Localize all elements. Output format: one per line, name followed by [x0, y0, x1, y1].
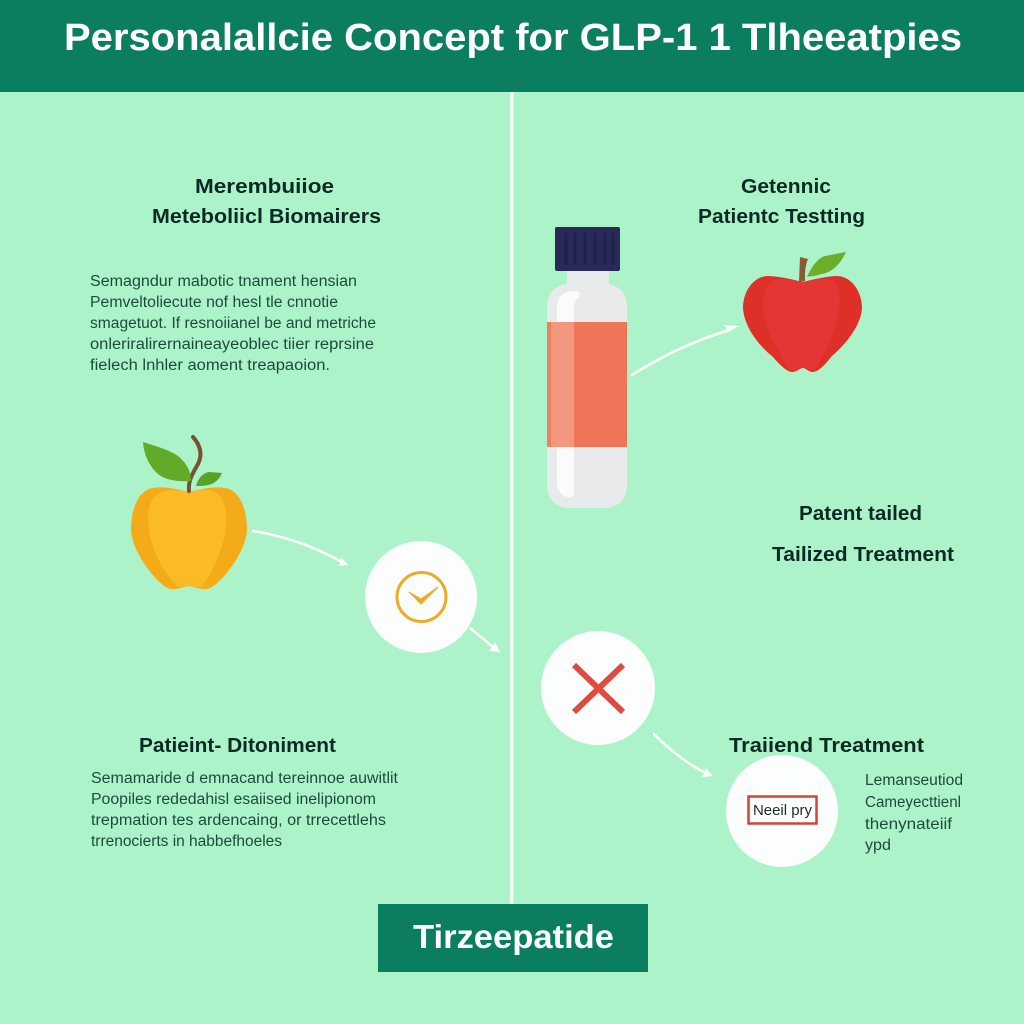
heading: patient bottom-left: Patieint- Ditoniment — [139, 734, 336, 757]
arrow: bottle to red apple — [632, 325, 740, 375]
title: Personalallcie Concept for GLP-1 1 Tlheeatpies — [64, 17, 962, 59]
text block: biomarkers description: Semagndur mabotic tnament hensian — [90, 273, 357, 290]
text block: biomarkers description: smagetuot. If resnoiianel be and metriche — [90, 315, 376, 332]
text block: biomarkers description: Pemveltoliecute nof hesl tle cnnotie — [90, 294, 338, 311]
heading: metabolic biomarkers — [152, 175, 381, 228]
text block: treatment description — [865, 772, 963, 854]
icon: medicine bottle — [547, 227, 627, 508]
header banner — [0, 0, 1024, 92]
heading: trained treatment: Traiiend Treatment — [729, 734, 924, 757]
bottle cap — [555, 227, 620, 271]
heading: tailized treatment: Tailized Treatment — [772, 543, 954, 566]
heading: genetic testing: Patientc Testting — [698, 205, 865, 228]
text block: biomarkers description: onleriralirernaineayeoblec tiier reprsine — [90, 336, 374, 353]
text block: patient description: trrenocierts in habbefhoeles — [91, 833, 282, 850]
icon: yellow apple — [131, 437, 247, 589]
icon: label circle: Neeil pry — [753, 802, 812, 819]
heading: metabolic biomarkers: Merembuiioe — [195, 175, 334, 198]
text block: treatment description: thenynateiif — [865, 816, 953, 833]
heading: genetic testing — [698, 175, 865, 228]
text block: patient description: Semamaride d emnacand tereinnoe auwitlit — [91, 770, 399, 787]
text block: patient description: Poopiles rededahisl esaiised inelipionom — [91, 791, 376, 808]
icon: check circle — [365, 541, 477, 653]
arrow: apple to check — [253, 531, 348, 566]
heading: patent tailed: Patent tailed — [799, 502, 922, 525]
text block: treatment description: Cameyecttienl — [865, 794, 961, 811]
icon: label circle — [726, 755, 838, 867]
text block: biomarkers description — [90, 273, 376, 374]
text block: biomarkers description: fielech lnhler aoment treapaoion. — [90, 357, 330, 374]
text block: patient description: trepmation tes ardencaing, or trrecettlehs — [91, 812, 386, 829]
arrow: check to center — [470, 628, 500, 652]
arrow: cross to treatment — [654, 734, 713, 777]
bottle label — [547, 322, 627, 447]
text block: patient description — [91, 770, 399, 850]
icon: red cross circle — [541, 631, 655, 745]
icon: red apple — [743, 252, 862, 372]
footer label: tirzepatide — [378, 904, 648, 972]
text block: treatment description: Lemanseutiod — [865, 772, 963, 789]
heading: genetic testing: Getennic — [741, 175, 831, 198]
footer label: tirzepatide: Tirzeepatide — [413, 918, 614, 955]
text block: treatment description: ypd — [865, 837, 891, 854]
heading: metabolic biomarkers: Meteboliicl Biomairers — [152, 205, 381, 228]
